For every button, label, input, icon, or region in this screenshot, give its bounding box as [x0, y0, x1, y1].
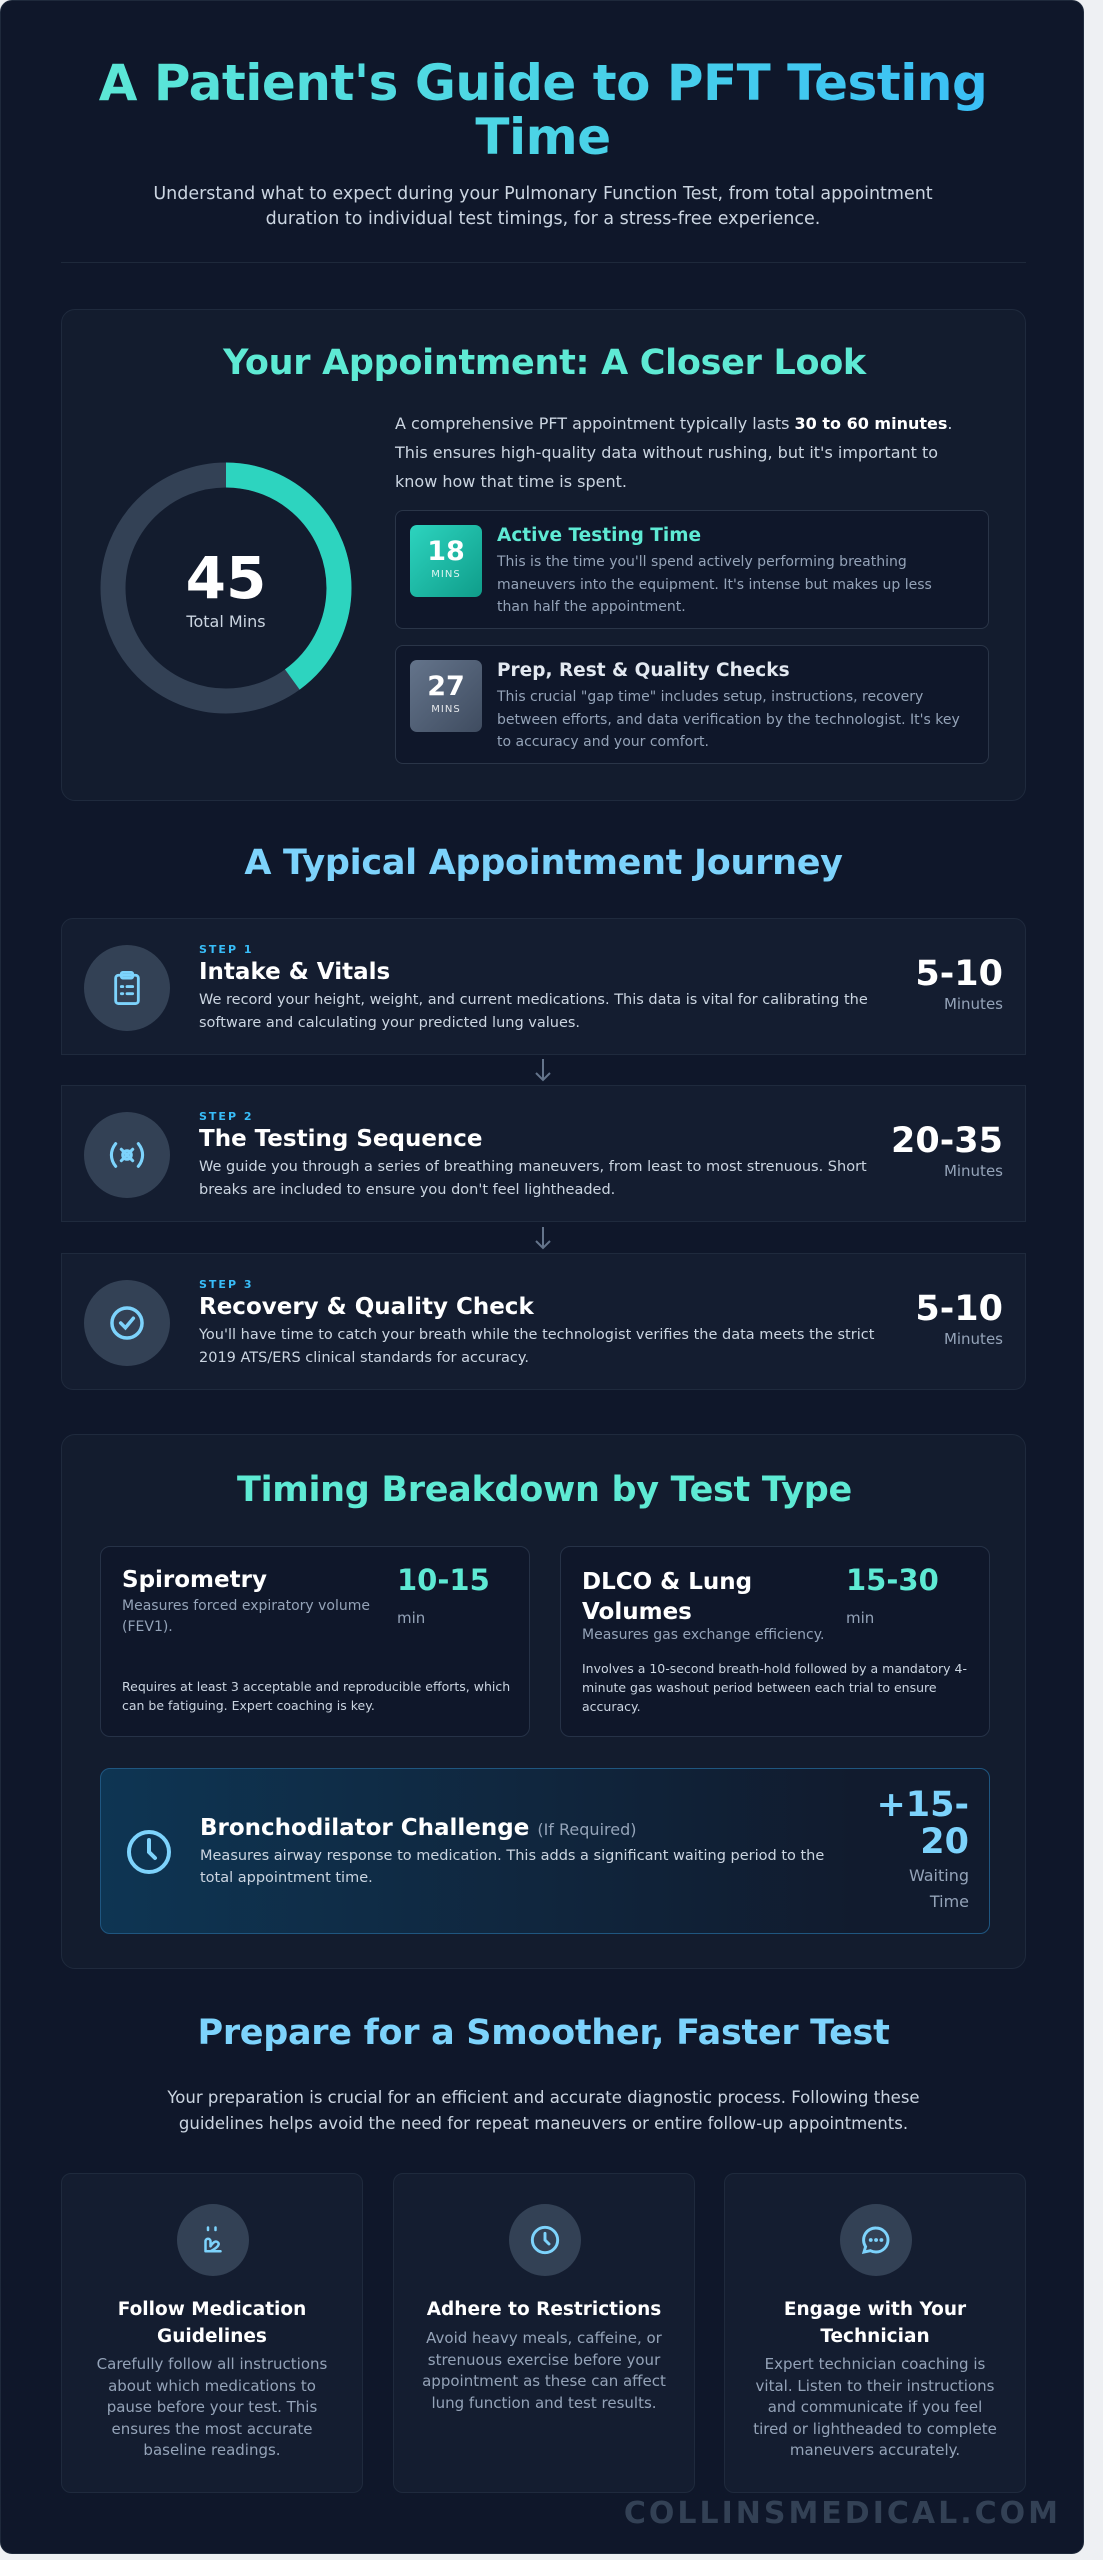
watermark: COLLINSMEDICAL.COM — [624, 2496, 1061, 2531]
card: DLCO: Involves a 10-second breath-hold followed by a mandatory 4-minute gas washout period between each trial to ensure accuracy. — [582, 1661, 967, 1714]
step 2: The Testing Sequence — [199, 1126, 483, 1152]
step 2: STEP 2 — [199, 1110, 254, 1123]
card: DLCO: min — [846, 1609, 874, 1627]
panel: appointment closer look — [61, 309, 1026, 801]
icon: breathing — [84, 1112, 170, 1198]
card: medication — [61, 2173, 363, 2493]
arrow — [535, 1059, 551, 1082]
step 2: We guide you through a series of breathing maneuvers, from least to most strenuous. Short breaks are included to ensure you don't feel lightheaded. — [199, 1159, 867, 1198]
card: spirometry — [100, 1546, 530, 1737]
icon: clock — [509, 2204, 581, 2276]
box: active testing: Active Testing Time — [497, 525, 701, 546]
panel: timing breakdown — [61, 1434, 1026, 1969]
card: technician: Engage with Your Technician — [784, 2299, 966, 2347]
step 1: 5-10 — [915, 954, 1003, 994]
step 3 — [61, 1253, 1026, 1390]
card: medication: Follow Medication Guidelines — [118, 2299, 306, 2347]
box: prep rest: MINS — [431, 704, 461, 715]
box: prep rest — [395, 645, 989, 764]
step 1: We record your height, weight, and current medications. This data is vital for calibrating the software and calculating your predicted lung values. — [199, 992, 868, 1031]
card: restrictions: Avoid heavy meals, caffeine, or strenuous exercise before your appointment as these can affect lung function and test results. — [422, 2329, 666, 2412]
intro paragraph: A comprehensive PFT appointment typically lasts 30 to 60 minutes. This ensures high-quality data without rushing, but it's important to know how that time is spent. — [395, 414, 952, 491]
step 1: Minutes — [944, 995, 1003, 1013]
card: bronchodilator: Waiting — [909, 1866, 969, 1885]
step 2: 20-35 — [891, 1121, 1003, 1161]
step 3: Recovery & Quality Check — [199, 1294, 534, 1320]
step 2 — [61, 1085, 1026, 1222]
subtitle: Understand what to expect during your Pulmonary Function Test, from total appointment duration to individual test timings, for a stress-free experience. — [153, 184, 933, 229]
card: technician: Expert technician coaching is vital. Listen to their instructions and communicate if you feel tired or lightheaded to complete maneuvers accurately. — [753, 2355, 997, 2459]
step 3: Minutes — [944, 1330, 1003, 1348]
card: restrictions: Adhere to Restrictions — [427, 2299, 661, 2320]
step 1 — [61, 918, 1026, 1055]
card: DLCO: 15-30 — [846, 1563, 939, 1597]
heading: Timing Breakdown by Test Type — [237, 1470, 852, 1510]
box: active testing: 18 — [427, 536, 465, 567]
title: A Patient's Guide to PFT Testing Time — [99, 54, 987, 166]
card: bronchodilator: Measures airway response to medication. This adds a significant waiting period to the total appointment time. — [200, 1848, 824, 1886]
card: restrictions — [393, 2173, 695, 2493]
intro text: Your preparation is crucial for an efficient and accurate diagnostic process. Following these guidelines helps avoid the need for repeat maneuvers or entire follow-up appointments. — [167, 2088, 920, 2133]
icon: clipboard — [84, 945, 170, 1031]
heading: journey: A Typical Appointment Journey — [244, 843, 843, 883]
arrow — [535, 1227, 551, 1250]
card: spirometry: Measures forced expiratory volume (FEV1). — [122, 1598, 370, 1635]
heading: Your Appointment: A Closer Look — [223, 343, 866, 383]
icon: chat bubble — [840, 2204, 912, 2276]
icon: check circle — [84, 1280, 170, 1366]
card: technician — [724, 2173, 1026, 2493]
card: spirometry: Spirometry — [122, 1567, 267, 1593]
card: DLCO — [560, 1546, 990, 1737]
card: bronchodilator: +15- — [876, 1785, 969, 1825]
box: prep rest: Prep, Rest & Quality Checks — [497, 660, 790, 681]
step 3: 5-10 — [915, 1289, 1003, 1329]
card: bronchodilator: 20 — [920, 1822, 969, 1862]
box: prep rest: 27 — [427, 671, 465, 702]
box: active testing: MINS — [431, 569, 461, 580]
step 2: Minutes — [944, 1162, 1003, 1180]
donut chart: 45 — [186, 544, 266, 612]
card: medication: Carefully follow all instructions about which medications to pause before your test. This ensures the most accurate baseline readings. — [97, 2355, 327, 2459]
icon: hand/pill — [177, 2204, 249, 2276]
box: active testing — [395, 510, 989, 629]
card: DLCO: DLCO & Lung Volumes — [582, 1569, 752, 1625]
card: spirometry: Requires at least 3 acceptable and reproducible efforts, which can be fatiguing. Expert coaching is key. — [122, 1679, 510, 1713]
donut chart — [100, 462, 352, 714]
card: DLCO: Measures gas exchange efficiency. — [582, 1627, 824, 1643]
donut chart: Total Mins — [186, 612, 266, 631]
icon: clock — [127, 1830, 171, 1874]
card: spirometry: min — [397, 1609, 425, 1627]
step 3: STEP 3 — [199, 1278, 254, 1291]
card: bronchodilator: Bronchodilator Challenge (If Required) — [200, 1815, 636, 1841]
box: active testing: This is the time you'll spend actively performing breathing maneuvers into the equipment. It's intense but makes up less than half the appointment. — [497, 554, 932, 615]
card: bronchodilator: Time — [930, 1892, 969, 1911]
card: bronchodilator — [100, 1768, 990, 1934]
card: spirometry: 10-15 — [397, 1563, 490, 1597]
box: prep rest: This crucial "gap time" includes setup, instructions, recovery between efforts, and data verification by the technologist. It's key to accuracy and your comfort. — [497, 689, 960, 750]
heading: prepare: Prepare for a Smoother, Faster Test — [197, 2013, 890, 2053]
step 1: STEP 1 — [199, 943, 254, 956]
step 1: Intake & Vitals — [199, 959, 390, 985]
step 3: You'll have time to catch your breath while the technologist verifies the data meets the strict 2019 ATS/ERS clinical standards for accuracy. — [199, 1327, 874, 1366]
